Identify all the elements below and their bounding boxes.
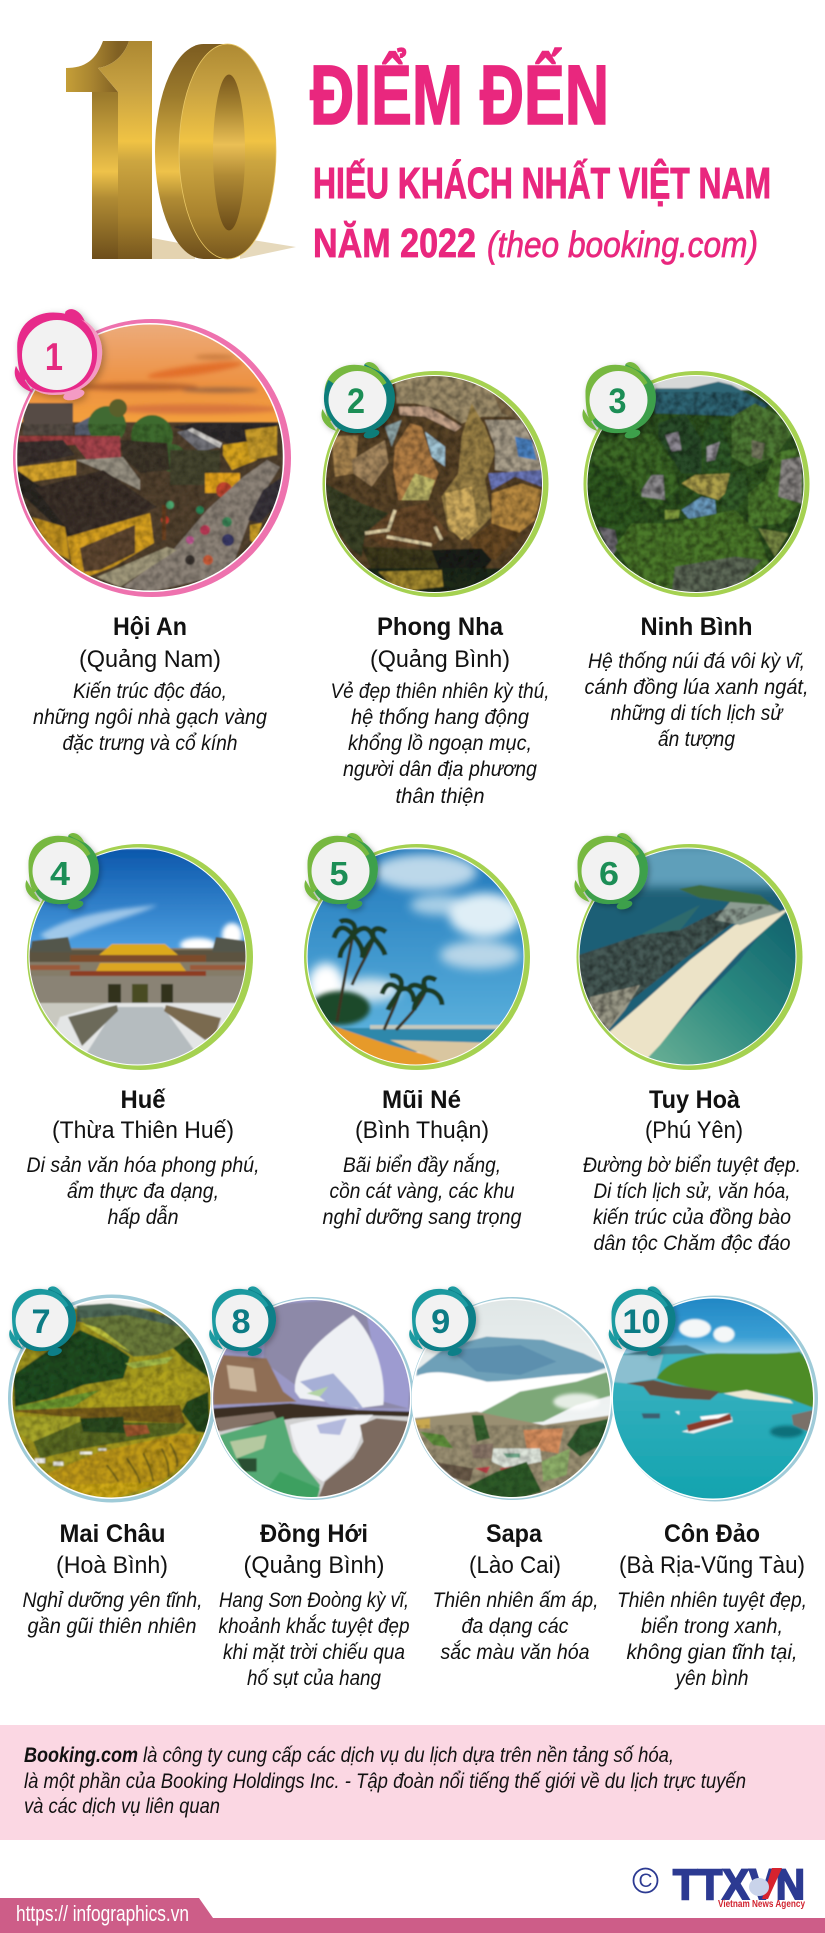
photo: Tuy Hoà xyxy=(576,844,802,1070)
badge: 5 xyxy=(304,833,378,911)
place name: Sapa xyxy=(432,1520,598,1664)
panel: Ninh Bình xyxy=(582,362,810,751)
place name: Hội An: những ngôi nhà gạch vàng xyxy=(33,706,267,729)
panel: Hội An xyxy=(13,309,291,755)
place name: Sapa: sắc màu văn hóa xyxy=(440,1641,590,1664)
panel: note on Booking.com: Booking.com xyxy=(24,1744,138,1767)
place name: Tuy Hoà: Đường bờ biển tuyệt đẹp. xyxy=(583,1154,801,1177)
heading: year: NĂM 2022 xyxy=(313,220,476,266)
place name: Huế: hấp dẫn xyxy=(108,1206,178,1229)
logo: TTXVN: Vietnam News Agency xyxy=(718,1899,805,1910)
photo: Mai Châu xyxy=(8,1294,217,1502)
place name: Huế: ẩm thực đa dạng, xyxy=(67,1180,219,1203)
place name: Sapa: Sapa xyxy=(486,1520,543,1548)
heading: main: ĐIỂM ĐẾN xyxy=(310,48,609,142)
place name: Phong Nha: hệ thống hang động xyxy=(351,706,529,729)
badge: 5: 5 xyxy=(330,855,348,892)
place name: Phong Nha: Vẻ đẹp thiên nhiên kỳ thú, xyxy=(330,680,550,703)
panel: Sapa xyxy=(409,1286,617,1664)
place name: Mai Châu: gần gũi thiên nhiên xyxy=(28,1615,196,1638)
badge: 1 xyxy=(15,309,102,402)
place name: Phong Nha: người dân địa phương xyxy=(343,758,537,781)
place name: Đồng Hới: hố sụt của hang xyxy=(247,1667,381,1690)
badge: 4 xyxy=(25,833,99,911)
logo: TTXVN: TTXVN xyxy=(673,1861,805,1909)
place name: Côn Đảo: biển trong xanh, xyxy=(641,1615,783,1638)
place name: Côn Đảo xyxy=(617,1520,807,1690)
place name: Phong Nha: thân thiện xyxy=(396,785,484,808)
heading: source: (theo booking.com) xyxy=(487,224,758,265)
badge: 3: 3 xyxy=(608,382,626,421)
footer bar with website xyxy=(0,1898,825,1933)
place name: Phong Nha: (Quảng Bình) xyxy=(370,646,510,673)
badge: 3 xyxy=(582,362,656,440)
place name: Ninh Bình: Hệ thống núi đá vôi kỳ vĩ, xyxy=(588,650,805,673)
panel: Mai Châu xyxy=(8,1286,217,1638)
place name: Côn Đảo: Thiên nhiên tuyệt đẹp, xyxy=(617,1589,807,1612)
photo: Mũi Né xyxy=(304,844,530,1070)
panel: note on Booking.com xyxy=(0,1725,825,1840)
place name: Phong Nha: Phong Nha xyxy=(377,613,504,641)
place name: Mai Châu: Mai Châu xyxy=(60,1520,166,1548)
place name: Mũi Né: (Bình Thuận) xyxy=(355,1117,489,1144)
place name: Huế xyxy=(26,1086,260,1229)
place name: Ninh Bình xyxy=(584,613,808,751)
place name: Hội An: Kiến trúc độc đáo, xyxy=(73,680,227,703)
photo: Ninh Bình xyxy=(584,371,810,597)
place name: Côn Đảo: yên bình xyxy=(674,1667,748,1690)
place name: Hội An xyxy=(33,613,267,755)
place name: Mũi Né: Bãi biển đầy nắng, xyxy=(343,1154,501,1177)
place name: Đồng Hới: Hang Sơn Đoòng kỳ vĩ, xyxy=(219,1589,409,1612)
badge: 6: 6 xyxy=(599,855,619,892)
badge: 4: 4 xyxy=(50,855,71,892)
photo: Đồng Hới xyxy=(210,1295,417,1502)
photo: Huế xyxy=(27,844,253,1070)
place name: Đồng Hới: khi mặt trời chiếu qua xyxy=(223,1641,405,1664)
place name: Côn Đảo: Côn Đảo xyxy=(664,1520,760,1548)
place name: Sapa: Thiên nhiên ấm áp, xyxy=(432,1589,598,1612)
place name: Mai Châu xyxy=(22,1520,202,1638)
title xyxy=(310,48,771,266)
panel: note on Booking.com: là công ty cung cấp các dịch vụ du lịch dựa trên nền tảng số hóa, xyxy=(143,1744,674,1767)
panel: Đồng Hới xyxy=(209,1286,417,1690)
place name: Mũi Né xyxy=(322,1086,522,1229)
place name: Đồng Hới: Đồng Hới xyxy=(260,1520,368,1548)
badge: 2 xyxy=(321,362,395,440)
place name: Tuy Hoà: kiến trúc của đồng bào xyxy=(593,1206,791,1229)
badge: 7 xyxy=(9,1286,76,1357)
place name: Côn Đảo: không gian tĩnh tại, xyxy=(626,1641,798,1664)
place name: Sapa: (Lào Cai) xyxy=(469,1552,561,1579)
place name: Tuy Hoà: Di tích lịch sử, văn hóa, xyxy=(594,1180,790,1203)
place name: Mũi Né: nghỉ dưỡng sang trọng xyxy=(322,1206,522,1229)
photo: Hội An xyxy=(13,319,291,597)
place name: Ninh Bình: ấn tượng xyxy=(658,728,735,751)
place name: Huế: Huế xyxy=(120,1086,166,1114)
place name: Hội An: Hội An xyxy=(113,613,187,641)
panel: Côn Đảo xyxy=(609,1286,818,1690)
badge: 10: 10 xyxy=(622,1303,661,1341)
panel: Phong Nha xyxy=(321,362,550,808)
place name: Phong Nha: khổng lồ ngoạn mục, xyxy=(348,732,532,755)
place name: Hội An: (Quảng Nam) xyxy=(79,646,221,673)
footer bar with website: https:// infographics.vn xyxy=(16,1901,189,1926)
photo: Côn Đảo xyxy=(610,1295,818,1502)
icon: gold number 10 xyxy=(66,41,296,259)
panel: Mũi Né xyxy=(304,833,530,1229)
place name: Ninh Bình: cánh đồng lúa xanh ngát, xyxy=(584,676,808,699)
badge: 8: 8 xyxy=(232,1303,251,1341)
place name: Đồng Hới: (Quảng Bình) xyxy=(244,1552,384,1579)
place name: Tuy Hoà: dân tộc Chăm độc đáo xyxy=(594,1232,791,1255)
logo: TTXVN: C xyxy=(639,1871,652,1892)
badge: 2: 2 xyxy=(347,382,365,421)
photo: Phong Nha xyxy=(322,371,548,597)
place name: Sapa: đa dạng các xyxy=(462,1615,569,1638)
place name: Tuy Hoà xyxy=(583,1086,801,1255)
place name: Ninh Bình: Ninh Bình xyxy=(640,613,752,641)
place name: Tuy Hoà: Tuy Hoà xyxy=(649,1086,740,1114)
photo: Sapa xyxy=(410,1295,617,1502)
badge: 10 xyxy=(609,1286,676,1357)
panel: note on Booking.com: là một phần của Booking Holdings Inc. - Tập đoàn nổi tiếng thế giới về du lịch trực tuyến xyxy=(24,1770,746,1793)
place name: Mũi Né: cồn cát vàng, các khu xyxy=(330,1180,515,1203)
badge: 6 xyxy=(574,833,648,911)
place name: Ninh Bình: những di tích lịch sử xyxy=(610,702,784,725)
place name: Mai Châu: Nghỉ dưỡng yên tĩnh, xyxy=(22,1589,202,1612)
panel: note on Booking.com: và các dịch vụ liên quan xyxy=(24,1795,220,1818)
place name: Phong Nha xyxy=(330,613,550,808)
place name: Huế: Di sản văn hóa phong phú, xyxy=(26,1154,260,1177)
badge: 1: 1 xyxy=(45,336,63,379)
badge: 9: 9 xyxy=(431,1303,450,1341)
badge: 8 xyxy=(209,1286,276,1357)
place name: Hội An: đặc trưng và cổ kính xyxy=(62,732,238,755)
panel: Tuy Hoà xyxy=(574,833,802,1255)
panel: Huế xyxy=(25,833,260,1229)
place name: Huế: (Thừa Thiên Huế) xyxy=(52,1117,234,1144)
badge: 7: 7 xyxy=(32,1303,51,1341)
place name: Tuy Hoà: (Phú Yên) xyxy=(645,1117,743,1144)
place name: Đồng Hới xyxy=(218,1520,410,1690)
place name: Mũi Né: Mũi Né xyxy=(382,1086,461,1114)
place name: Mai Châu: (Hoà Bình) xyxy=(56,1552,168,1579)
badge: 9 xyxy=(409,1286,476,1357)
place name: Đồng Hới: khoảnh khắc tuyệt đẹp xyxy=(218,1615,410,1638)
place name: Côn Đảo: (Bà Rịa-Vũng Tàu) xyxy=(619,1552,805,1579)
